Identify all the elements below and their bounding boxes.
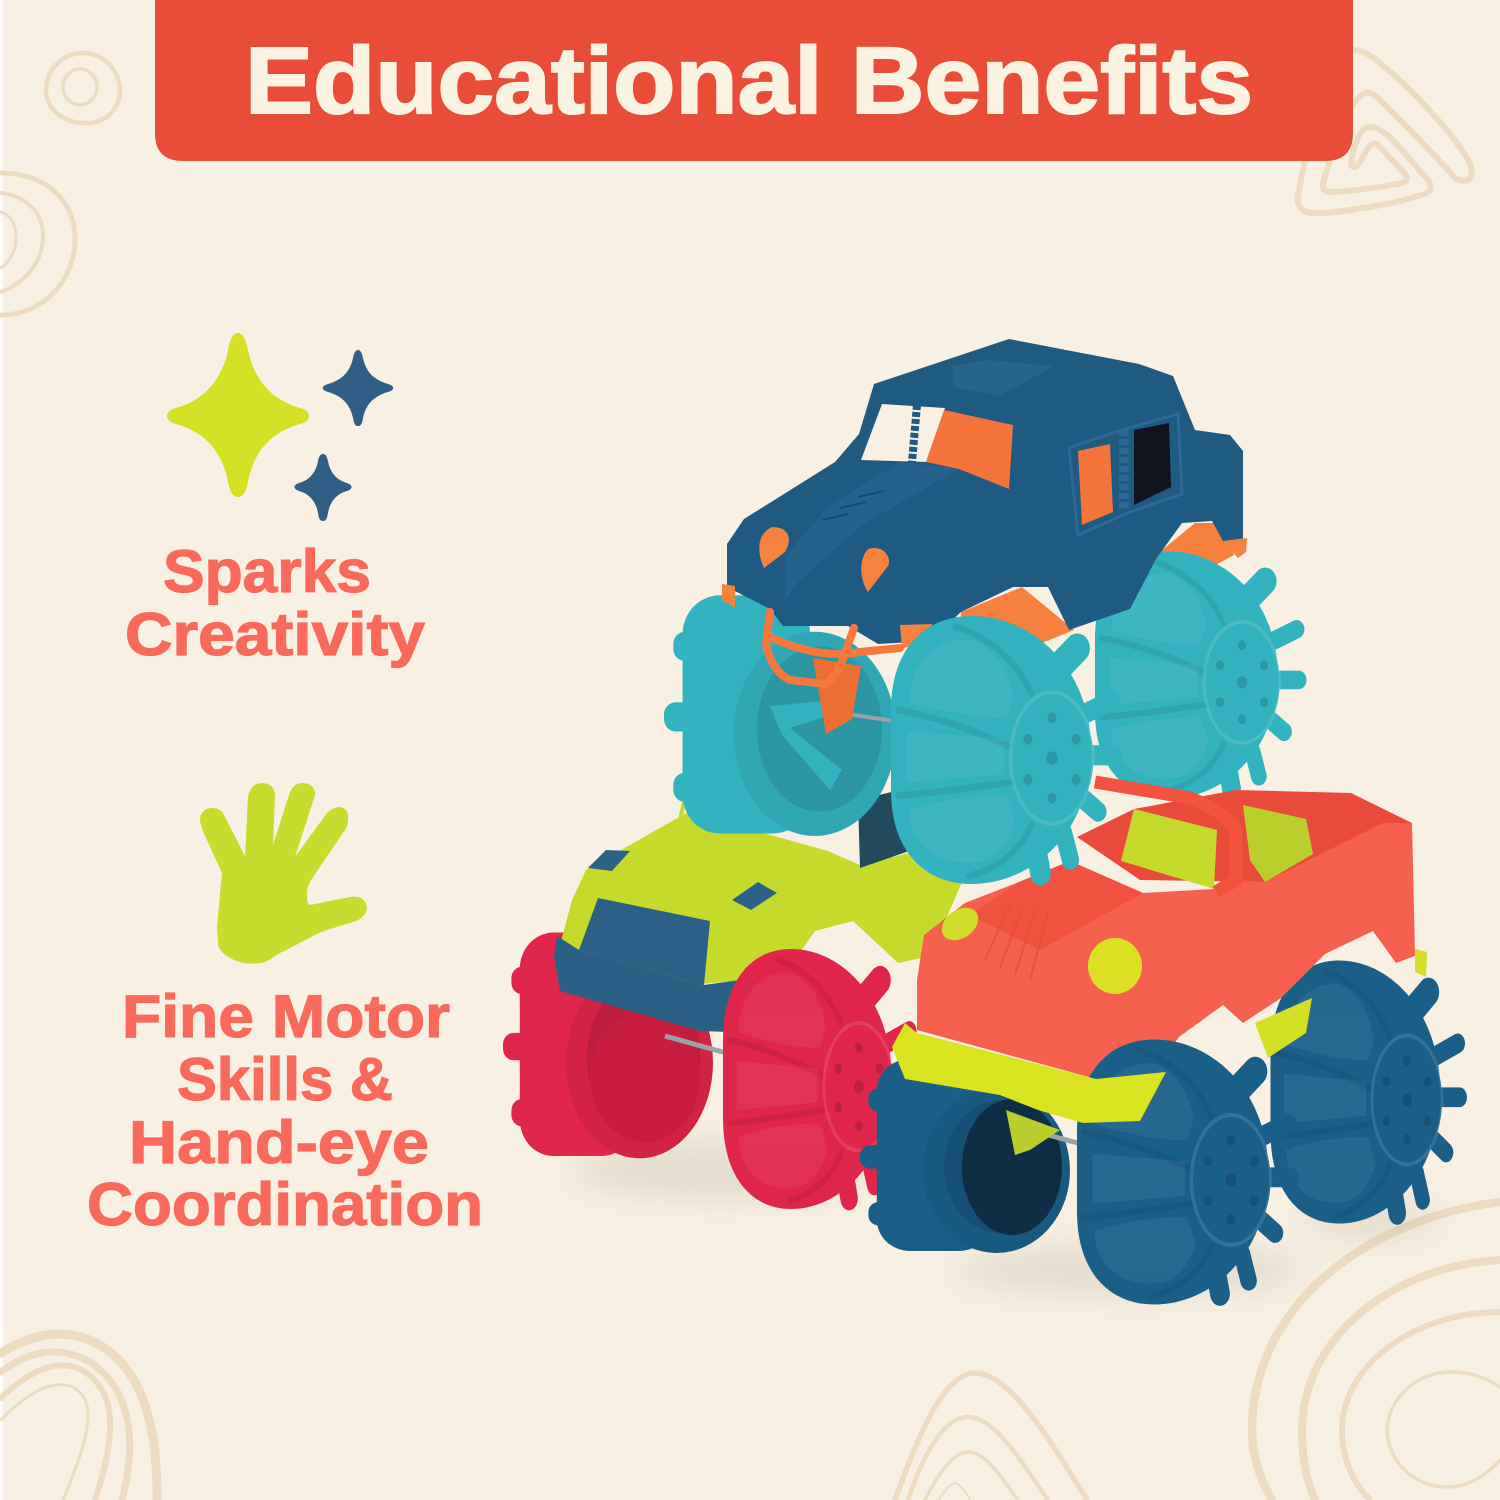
teal back wheels of blue truck bbox=[664, 523, 1299, 836]
lime truck bumper bbox=[554, 936, 790, 1033]
tow hook bbox=[766, 612, 900, 684]
wheel spokes bbox=[770, 700, 842, 790]
teal front wheel bbox=[891, 616, 1114, 884]
text: fine motor skills: Hand-eye bbox=[129, 1109, 429, 1176]
icon: sparkles bbox=[167, 333, 393, 521]
spring post bbox=[912, 405, 917, 462]
red truck hood top bbox=[970, 861, 1143, 950]
red truck bed interior bbox=[1077, 790, 1412, 882]
axle bbox=[1030, 1130, 1085, 1145]
rear orange underbody bbox=[1156, 523, 1234, 590]
lime side pieces bbox=[1255, 998, 1312, 1058]
toy truck: lime with red wheels bbox=[503, 775, 962, 1209]
text: sparks creativity bbox=[125, 538, 426, 668]
hood vents bbox=[985, 905, 1048, 980]
windshield opening bbox=[861, 404, 945, 462]
text: sparks creativity: Sparks bbox=[163, 538, 371, 605]
dark side window bbox=[1134, 423, 1171, 505]
red inner hole bbox=[590, 1012, 700, 1142]
toy truck: navy with teal wheels bbox=[722, 339, 1247, 884]
orange plate bbox=[813, 658, 861, 734]
lime truck body bbox=[560, 812, 962, 984]
roll bar bbox=[1095, 782, 1236, 892]
navy cab and hood bbox=[727, 339, 1243, 644]
roof vent bbox=[952, 360, 1054, 396]
side window frame bbox=[1069, 414, 1182, 535]
ground shadows bbox=[570, 1140, 1440, 1296]
red front wheel bbox=[723, 949, 911, 1209]
lime plate bbox=[1006, 1110, 1060, 1155]
lime truck roof post bbox=[680, 775, 690, 820]
text: sparks creativity: Creativity bbox=[125, 601, 426, 668]
text: fine motor skills: Skills & bbox=[177, 1046, 393, 1113]
icon: hand bbox=[200, 783, 367, 964]
red truck body bbox=[917, 823, 1415, 1079]
orange underbody bbox=[960, 587, 1074, 660]
orange seat bbox=[926, 410, 1013, 489]
navy front wheel bbox=[1077, 1040, 1290, 1304]
hood lighter panel bbox=[785, 462, 959, 600]
left white edge bbox=[0, 0, 3, 1500]
axle bbox=[835, 712, 900, 722]
navy inner hole bbox=[962, 1099, 1062, 1235]
orange headlights bbox=[759, 527, 789, 568]
text: fine motor skills: Coordination bbox=[87, 1171, 483, 1238]
text: fine motor skills bbox=[87, 983, 483, 1238]
lime truck headlight marks bbox=[588, 850, 630, 871]
hood vent slots bbox=[822, 491, 884, 520]
toy truck: red with navy wheels bbox=[860, 782, 1460, 1304]
orange side seat bbox=[1078, 444, 1113, 525]
navy inner wheel bbox=[860, 1059, 1070, 1253]
red rear inner wheel bbox=[503, 933, 713, 1158]
lime headlights bbox=[1088, 938, 1142, 994]
title banner bbox=[155, 0, 1353, 161]
orange corners bbox=[722, 584, 932, 648]
title: Educational Benefits bbox=[245, 28, 1253, 134]
side spring bbox=[1119, 430, 1129, 510]
lime truck grille bbox=[579, 898, 710, 985]
axle bbox=[665, 1036, 730, 1054]
navy back wheel bbox=[1270, 960, 1460, 1224]
lime truck cab window bbox=[858, 790, 912, 868]
text: fine motor skills: Fine Motor bbox=[122, 983, 450, 1050]
lime seats bbox=[1121, 809, 1217, 889]
yellow bumper bbox=[892, 1023, 1166, 1123]
